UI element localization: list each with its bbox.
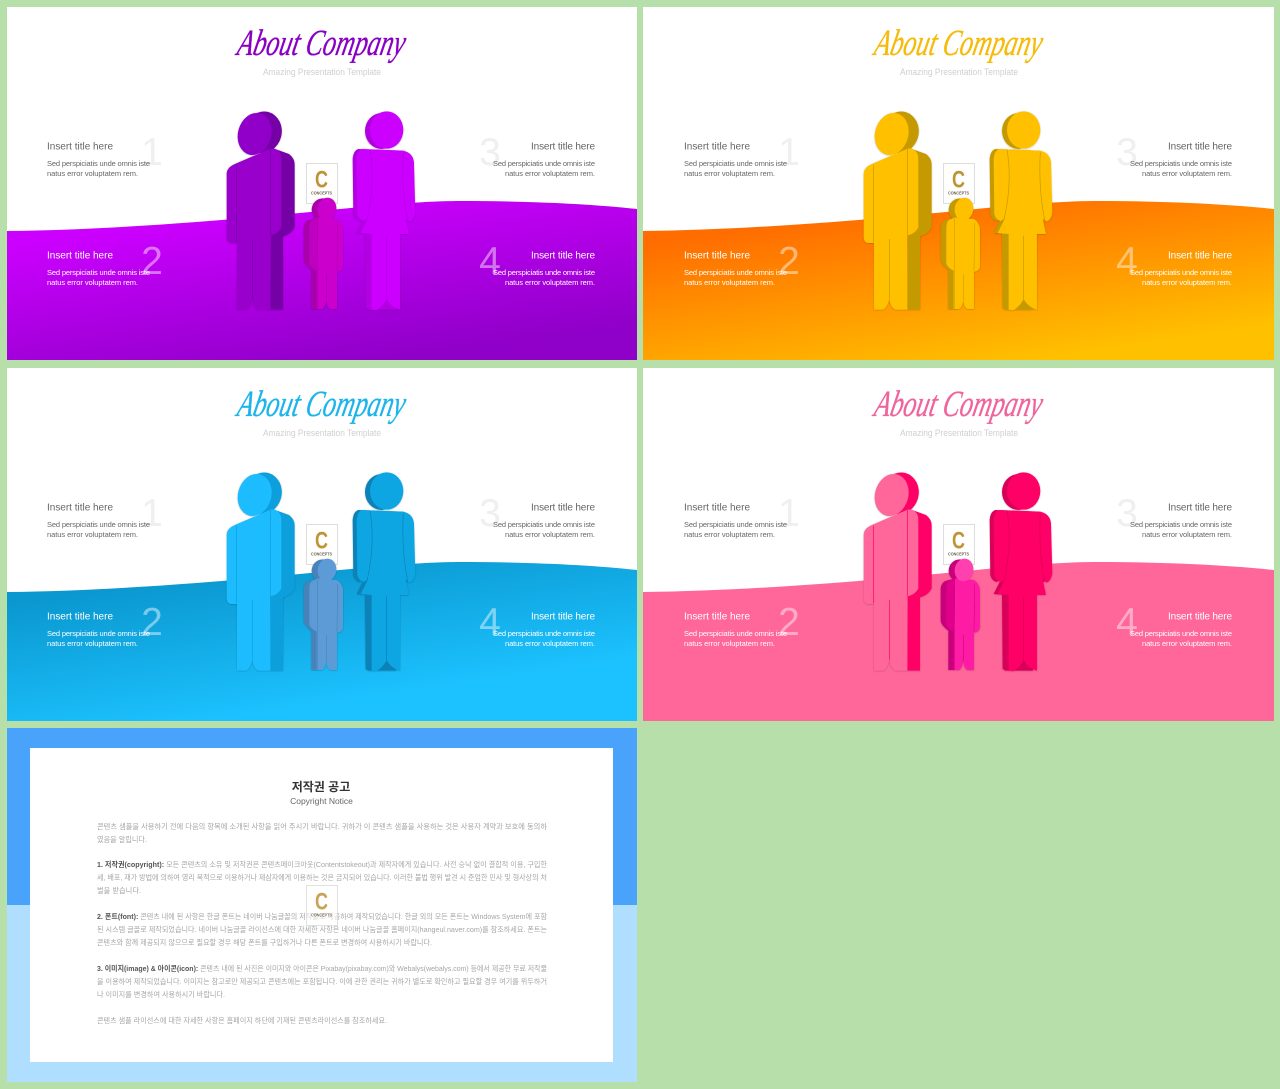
subtitle: Amazing Presentation Template [263, 428, 381, 438]
logo: C [315, 528, 328, 554]
panel: blue slide [7, 368, 637, 721]
logo: CONCEPTS [311, 552, 332, 556]
logo: CONCEPTS [948, 552, 969, 556]
item 4: Sed perspiciatis unde omnis iste [1130, 629, 1232, 638]
item 2 [47, 601, 163, 648]
item 4: Insert title here [1168, 250, 1232, 262]
item 4: Insert title here [531, 612, 595, 622]
panel: purple slide [7, 7, 637, 360]
item 3: natus error voluptatem rem. [1142, 169, 1232, 178]
intro text [97, 821, 547, 844]
item 2 [684, 601, 800, 648]
item 2: 2 [778, 240, 800, 283]
icon: woman figure [353, 111, 415, 310]
item 2: 2 [141, 601, 163, 644]
item 2: Insert title here [47, 250, 113, 262]
item 3: Sed perspiciatis unde omnis iste [1130, 520, 1232, 529]
item 1 [47, 131, 163, 178]
wave background [7, 562, 637, 721]
item 4: Insert title here [1168, 612, 1232, 622]
section 2: font: 된 시스템 글꼴로 제작되었습니다. 네이버 나눔글꼴 라이선스에 대한 자세한 사항은 네이버 나눔글꼴 홈페이지(hangeul.naver.com)를 참조하세요. 폰트는 [97, 924, 547, 934]
title: About Company [232, 384, 410, 425]
item 4: 4 [1116, 601, 1138, 644]
closing note: 콘텐츠 샘플 라이선스에 대한 자세한 사항은 홈페이지 하단에 기재된 콘텐츠라이선스를 참조하세요. [97, 1015, 387, 1025]
item 4 [479, 240, 595, 287]
item 3 [1116, 131, 1232, 178]
logo: CONCEPTS [311, 912, 332, 918]
item 1: 1 [778, 492, 800, 535]
item 2: Sed perspiciatis unde omnis iste [47, 629, 150, 638]
item 3: natus error voluptatem rem. [1142, 530, 1232, 539]
item 3: Insert title here [531, 142, 595, 152]
item 4: 4 [479, 240, 501, 283]
subtitle: Amazing Presentation Template [900, 428, 1018, 438]
item 4: Sed perspiciatis unde omnis iste [493, 629, 595, 638]
item 2 [47, 240, 163, 287]
item 3: 3 [1116, 492, 1138, 535]
item 3: 3 [479, 131, 501, 174]
logo [306, 524, 338, 564]
item 4 [1116, 240, 1232, 287]
item 2: natus error voluptatem rem. [684, 278, 775, 287]
icon: woman figure [353, 472, 415, 671]
section 2: font: 2. 폰트(font): 콘텐츠 내에 된 사항은 한글 폰트는 네이버 나눔글꼴의 저작물로 제공하여 제작되었습니다. 한글 외의 모든 폰트는 Windows System에 포함 [97, 911, 547, 921]
logo [306, 164, 338, 204]
item 1: Sed perspiciatis unde omnis iste [47, 520, 150, 529]
item 1: natus error voluptatem rem. [47, 530, 138, 539]
section 3: image and icon: 을 이용하여 제작되었습니다. 이미지는 참고로만 제공되고 콘텐츠에는 포함됩니다. 이에 관한 권리는 귀하가 별도로 확인하고 필요할 경우 여기를 위두하거 [97, 976, 547, 986]
item 3: Insert title here [1168, 142, 1232, 152]
icon: woman figure [990, 111, 1052, 310]
item 2: Insert title here [684, 612, 750, 622]
item 3: natus error voluptatem rem. [505, 169, 595, 178]
item 1: Sed perspiciatis unde omnis iste [47, 159, 150, 168]
item 2: natus error voluptatem rem. [47, 278, 138, 287]
section 1: copyright: 벌을 받습니다. [97, 885, 141, 895]
item 1: natus error voluptatem rem. [684, 169, 775, 178]
item 1: Sed perspiciatis unde omnis iste [684, 159, 787, 168]
section 3: image and icon [97, 963, 547, 999]
item 1: Insert title here [684, 502, 750, 514]
item 1: Sed perspiciatis unde omnis iste [684, 520, 787, 529]
icon: child figure [304, 196, 343, 309]
item 4: Sed perspiciatis unde omnis iste [493, 268, 595, 277]
item 1: Insert title here [684, 142, 750, 152]
wave background [643, 562, 1274, 721]
panel: pink slide [643, 368, 1274, 721]
item 4: natus error voluptatem rem. [505, 278, 595, 287]
section 2: font: 콘텐츠와 함께 제공되지 않으므로 필요할 경우 해당 폰트를 구입하거나 다른 폰트로 변경하여 사용하시기 바랍니다. [97, 937, 432, 947]
subheading: Copyright Notice [290, 796, 353, 806]
item 4 [479, 601, 595, 648]
section 3: image and icon: 나 이미지를 변경하여 사용하시기 바랍니다. [97, 989, 225, 999]
item 2: natus error voluptatem rem. [47, 639, 138, 648]
subtitle: Amazing Presentation Template [263, 67, 381, 77]
item 1: 1 [778, 131, 800, 174]
section 1: copyright [97, 859, 547, 895]
item 1: 1 [141, 492, 163, 535]
item 3 [479, 131, 595, 178]
item 3: Sed perspiciatis unde omnis iste [493, 159, 595, 168]
section 1: copyright: 세, 배포, 재가 방법에 의하여 영리 목적으로 이용하거나 제삼자에게 이용하는 것은 금지되어 있습니다. 이러한 불법 행위 발견 시 준엄한 민사 및 형사상의 처 [97, 872, 547, 882]
logo: C [315, 888, 328, 916]
item 3 [479, 492, 595, 539]
item 3: Sed perspiciatis unde omnis iste [493, 520, 595, 529]
item 1: Insert title here [47, 142, 113, 152]
item 2: 2 [141, 240, 163, 283]
panel: orange slide [643, 7, 1274, 360]
item 2: 2 [778, 601, 800, 644]
item 1: natus error voluptatem rem. [47, 169, 138, 178]
item 4: 4 [479, 601, 501, 644]
section 2: font [97, 911, 547, 947]
item 3 [1116, 492, 1232, 539]
panel: copyright notice [7, 728, 637, 1082]
subtitle: Amazing Presentation Template [900, 67, 1018, 77]
item 1 [684, 492, 800, 539]
logo [944, 164, 974, 204]
item 1: Insert title here [47, 502, 113, 514]
logo: CONCEPTS [311, 190, 332, 196]
logo: C [952, 528, 965, 554]
logo: C [315, 166, 328, 194]
intro text: 였음을 알립니다. [97, 834, 147, 844]
wave background [643, 201, 1274, 360]
heading: copyright notice: 저작권 공고 [292, 779, 350, 794]
item 4: natus error voluptatem rem. [1142, 278, 1232, 287]
logo [306, 886, 338, 926]
section 3: image and icon: 3. 이미지(image) & 아이콘(icon): 콘텐츠 내에 된 사진은 이미지와 아이콘은 Pixabay(pixabay.com)와 Webalys(webalys.com) 등에서 제공한 무료 저작물 [97, 963, 547, 973]
item 4 [1116, 601, 1232, 648]
title: About Company [869, 384, 1047, 425]
item 1: 1 [141, 131, 163, 174]
item 2: Insert title here [684, 250, 750, 262]
title: About Company [869, 23, 1047, 64]
item 4: Insert title here [531, 250, 595, 262]
section 1: copyright: 1. 저작권(copyright): 모든 콘텐츠의 소유 및 저작권은 콘텐츠메이크아웃(Contentstokeout)과 제작자에게 있습니다. 사전 승낙 없이 결합적 이용, 구입한 [97, 859, 547, 869]
title: About Company [232, 23, 410, 64]
icon: child figure [941, 196, 980, 309]
logo [944, 524, 974, 564]
item 4: Sed perspiciatis unde omnis iste [1130, 268, 1232, 277]
item 4: natus error voluptatem rem. [1142, 639, 1232, 648]
item 2: Sed perspiciatis unde omnis iste [684, 629, 787, 638]
item 1 [47, 492, 163, 539]
item 3: natus error voluptatem rem. [505, 530, 595, 539]
item 3: Insert title here [531, 502, 595, 514]
logo: C [952, 166, 965, 194]
wave background [7, 201, 637, 360]
intro text: 콘텐츠 샘플을 사용하기 전에 다음의 항목에 소개된 사항을 읽어 주시기 바랍니다. 귀하가 이 콘텐츠 샘플을 사용하는 것은 사용자 계약과 보호에 동의하 [97, 821, 547, 831]
logo: CONCEPTS [948, 190, 969, 196]
item 4: 4 [1116, 240, 1138, 283]
item 1 [684, 131, 800, 178]
icon: man figure [864, 468, 932, 671]
icon: child figure [304, 557, 343, 670]
item 3: 3 [1116, 131, 1138, 174]
item 4: natus error voluptatem rem. [505, 639, 595, 648]
item 2: Sed perspiciatis unde omnis iste [47, 268, 150, 277]
item 1: natus error voluptatem rem. [684, 530, 775, 539]
item 2: Insert title here [47, 612, 113, 622]
icon: man figure [227, 468, 295, 671]
item 3: Insert title here [1168, 502, 1232, 514]
item 2: Sed perspiciatis unde omnis iste [684, 268, 787, 277]
icon: man figure [864, 107, 932, 310]
icon: woman figure [990, 472, 1052, 671]
item 3: Sed perspiciatis unde omnis iste [1130, 159, 1232, 168]
item 3: 3 [479, 492, 501, 535]
item 2: natus error voluptatem rem. [684, 639, 775, 648]
icon: man figure [227, 107, 295, 310]
item 2 [684, 240, 800, 287]
icon: child figure [941, 557, 980, 670]
